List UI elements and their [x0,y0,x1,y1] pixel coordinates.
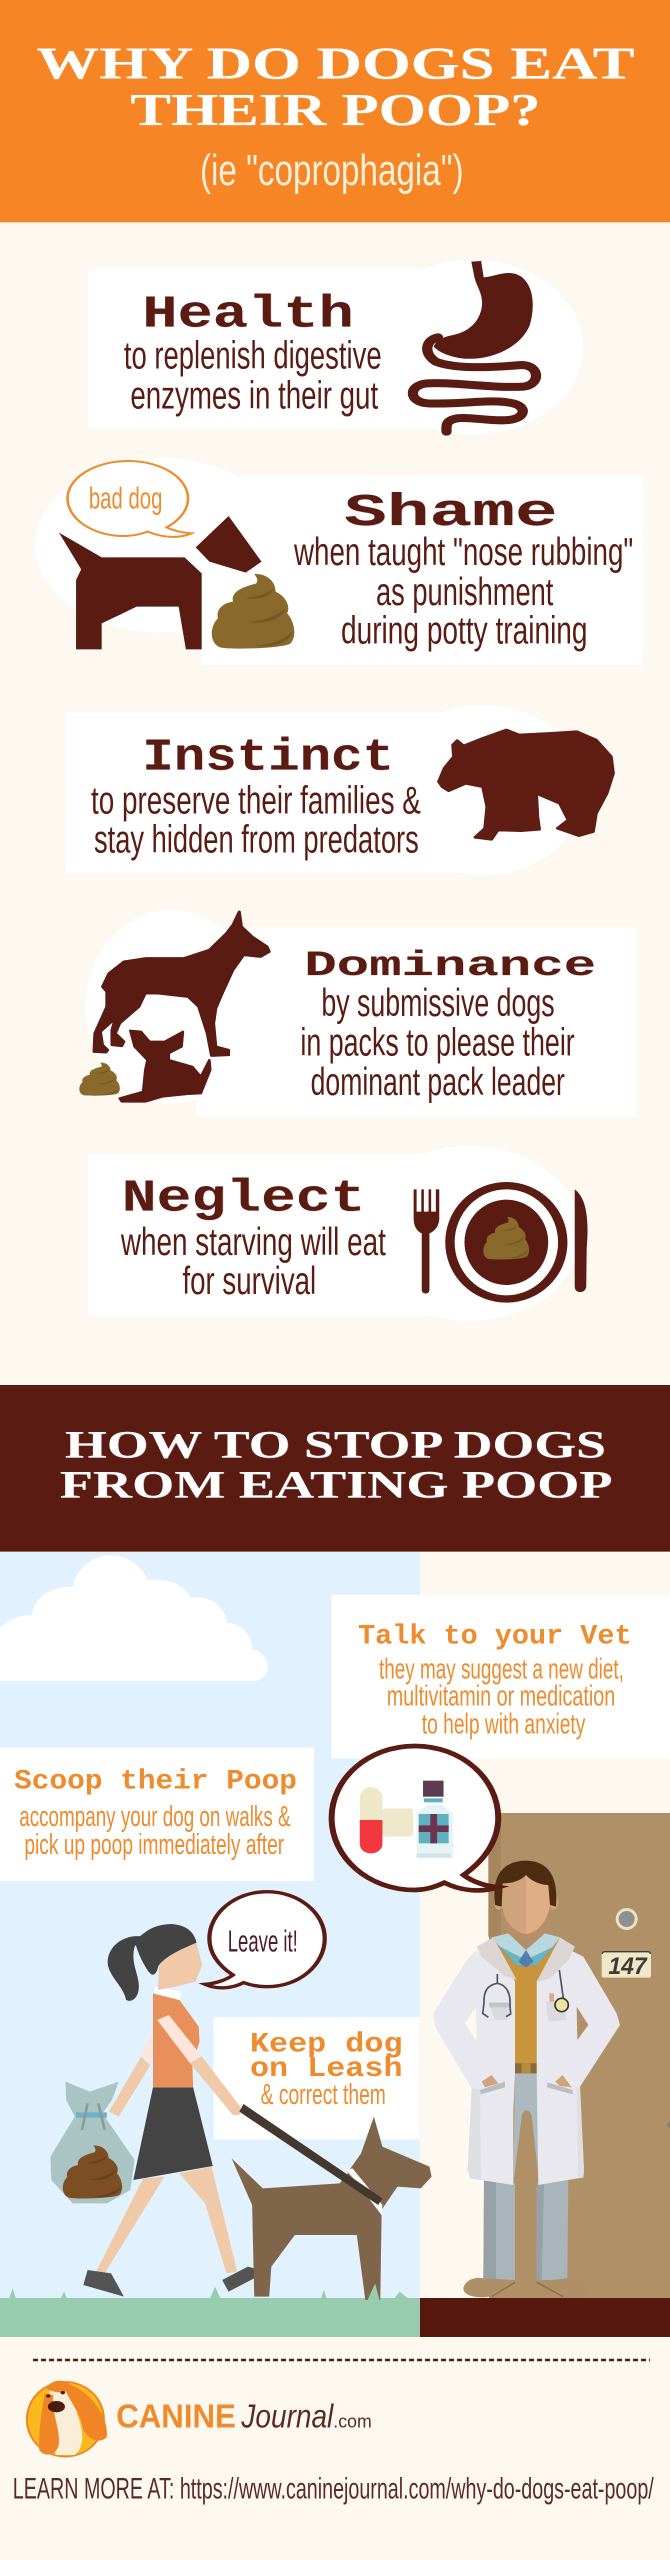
section title: HOW TO STOP DOGS [65,1423,606,1466]
title: WHY DO DOGS EAT [36,38,635,89]
health heading: Health [142,289,354,341]
icon: cloud [0,1555,268,1681]
dominance background [85,910,637,1117]
panel: talk to your vet and scoop [0,1555,670,1881]
leash heading: on Leash [250,2053,403,2085]
dominance text [300,980,575,1104]
icon: stomach and intestines [413,261,536,432]
section title: FROM EATING POOP [60,1463,612,1506]
instinct text: to preserve their families & [91,778,421,822]
icon: small dog [120,1031,210,1102]
shame text [293,529,633,652]
icon: speech bubble bad dog [68,461,191,537]
grass tufts [9,2283,410,2300]
icon: dog [59,516,262,649]
neglect text [120,1219,386,1303]
dominance heading: Dominance [304,947,596,986]
door number plate: 147 [608,1953,648,1980]
subtitle: (ie "coprophagia") [200,145,464,195]
scoop heading: Scoop their Poop [14,1765,297,1797]
panel: shame [35,458,643,665]
instinct background [66,705,585,875]
stethoscope and pockets [480,1970,573,2094]
icon: plate [450,1186,563,1299]
logo wordmark: .com [333,2412,372,2432]
vet text [379,1652,624,1739]
leash heading: Keep dog [250,2028,403,2060]
illustration: walking woman [83,1924,267,2297]
health text: to replenish digestive [124,333,382,377]
scene: people and dog [9,1746,498,2300]
icon: knife [575,1189,588,1292]
leash heading [250,2028,403,2085]
shoes [463,2278,587,2297]
neglect text: when starving will eat [120,1219,386,1264]
neglect heading: Neglect [122,1173,365,1225]
instinct heading: Instinct [142,732,394,783]
icon: door peephole [616,1908,638,1930]
logo wordmark [116,2398,372,2435]
panel: instinct [66,705,613,875]
icon: speech bubble bad dog: bad dog [89,481,162,515]
health background [88,260,583,435]
icon: bear [439,730,613,839]
header banner [0,0,670,222]
footer [13,2381,654,2505]
illustration: brown dog [232,2117,432,2300]
icon: poop [212,574,294,649]
icon: small poop [79,1063,120,1096]
scoop background [0,1748,314,1881]
icon: poop bag [50,2082,135,2203]
illustration: vet at door [433,1813,670,2297]
icon: big dog [94,912,269,1056]
vet background [332,1595,670,1758]
health text: enzymes in their gut [130,373,378,417]
panel: neglect [88,1146,588,1321]
panel: health [88,260,583,435]
logo wordmark: Journal [241,2398,334,2435]
leash [239,2104,382,2205]
speech bubble: leave it [205,1892,325,1988]
scoop text: accompany your dog on walks & [19,1800,291,1832]
icon: pills [360,1787,413,1853]
logo wordmark: CANINE [116,2398,236,2435]
leash text: & correct them [261,2078,386,2110]
instinct text [91,778,421,861]
neglect background [88,1146,581,1321]
neglect text: for survival [182,1258,316,1303]
speech bubble: medication [332,1746,498,1890]
banner: how to stop [0,1385,670,1552]
icon: fork [414,1189,439,1293]
shame heading: Shame [344,488,558,539]
door handle [667,2123,670,2127]
panel: keep dog on leash [214,2017,420,2139]
title: THEIR POOP? [130,85,541,135]
icon: medicine bottle [417,1781,453,1858]
speech bubble: leave it: Leave it! [228,1925,298,1959]
scene: sky and door backdrop [0,1552,670,2337]
shame background [35,458,643,665]
footer divider [33,2359,650,2361]
trousers [483,2073,568,2280]
health text [124,333,382,417]
panel: dominance [79,910,637,1117]
scoop text: pick up poop immediately after [24,1828,284,1860]
logo: basset hound [27,2381,107,2457]
lab coat [433,1950,620,2185]
head and collar [477,1861,575,2073]
title [36,38,635,135]
scoop text [19,1800,291,1860]
section title [60,1423,612,1506]
